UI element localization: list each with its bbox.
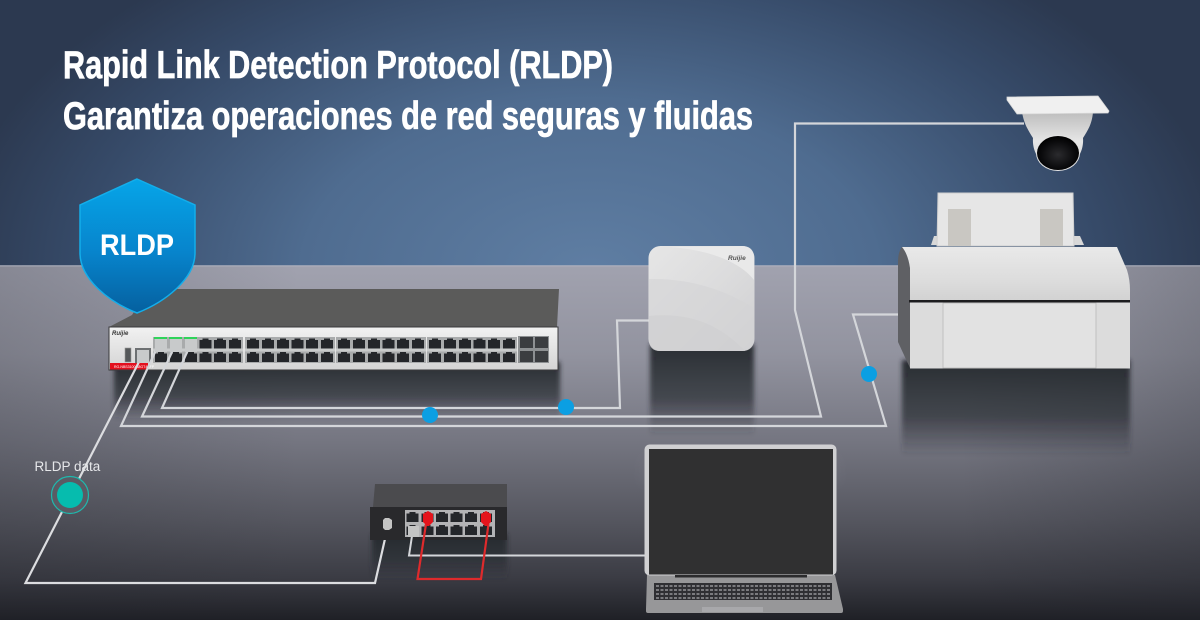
title: Garantiza operaciones de red seguras y fluidas: [63, 95, 753, 138]
printer top: [902, 247, 1130, 301]
laptop plug: [408, 526, 419, 537]
network switch: [109, 289, 559, 370]
rldp data packet: [52, 476, 88, 514]
port group 2: [245, 337, 335, 363]
access point logo: Ruijie: [728, 255, 746, 262]
switch front panel: [109, 327, 558, 370]
switch logo: Ruijie: [112, 331, 129, 337]
switch model strip: [110, 363, 155, 370]
printer slot: [909, 300, 1130, 302]
port group 3: [336, 337, 426, 363]
access point: [648, 246, 754, 351]
cable: switch to printer: [121, 314, 902, 426]
printer: [898, 193, 1130, 368]
laptop keyboard: [654, 583, 832, 600]
rldp data label: RLDP data: [34, 459, 101, 474]
laptop touchpad: [702, 607, 763, 612]
port group 1: [153, 337, 243, 363]
sfp ports: [518, 336, 549, 363]
console port: [135, 348, 151, 363]
data packet dots: [422, 366, 877, 423]
cable: switch to access point: [162, 320, 650, 408]
uplink plug: [383, 518, 392, 530]
title: [63, 44, 753, 138]
usb port: [125, 348, 131, 362]
switch model strip: RG-NBS3100-48GT4SFP: [114, 365, 155, 369]
printer side: [898, 247, 915, 368]
port group 4: [427, 337, 517, 363]
small switch: [370, 484, 645, 579]
printer front: [910, 302, 1130, 368]
reflections on the floor: [114, 344, 1130, 580]
switch top face: [109, 289, 559, 327]
red plugs: [423, 511, 491, 526]
laptop base: [646, 575, 843, 613]
paper tray: [931, 193, 1084, 246]
laptop cable: [409, 536, 645, 556]
rldp shield: [80, 179, 195, 313]
title: Rapid Link Detection Protocol (RLDP): [63, 44, 613, 87]
small switch ports: [405, 510, 495, 537]
laptop: [644, 444, 843, 613]
laptop screen: [644, 444, 836, 576]
ip camera: [1007, 96, 1109, 171]
cable plugs: [137, 339, 197, 363]
cable: switch to small switch: [26, 358, 387, 583]
floor: [0, 265, 1200, 620]
link lights: [154, 337, 197, 339]
rldp shield: RLDP: [100, 229, 174, 262]
red loop cable: [418, 524, 488, 579]
background wall: [0, 0, 1200, 266]
cable: switch to IP camera: [142, 124, 1024, 416]
